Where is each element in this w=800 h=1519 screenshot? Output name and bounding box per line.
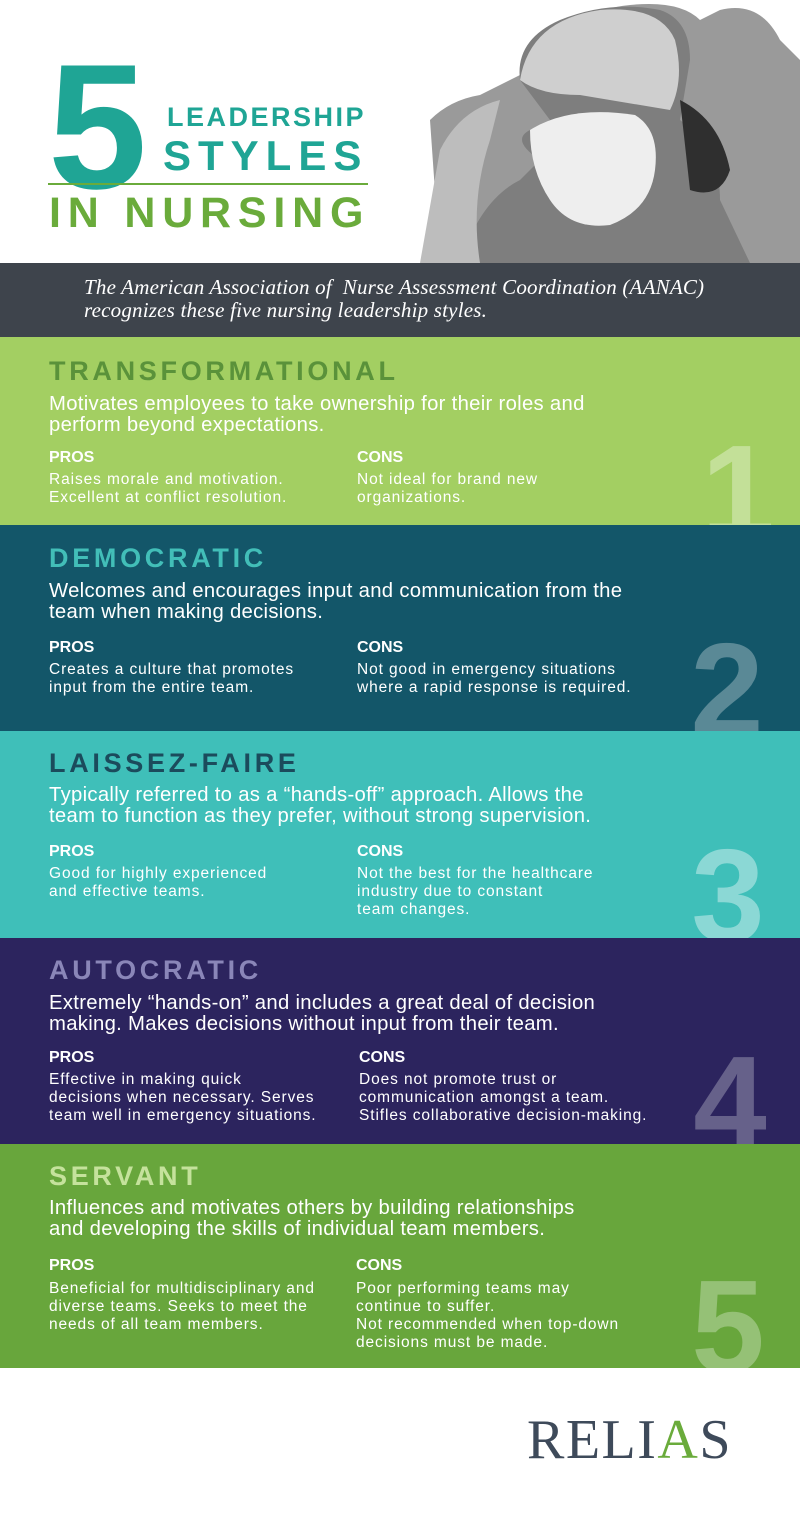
panel: servant: decisions must be made. [356,1334,548,1351]
cons: CONS [357,639,403,656]
panel: democratic: Creates a culture that promotes [49,661,294,678]
panel: servant [0,1144,800,1368]
heading: LAISSEZ-FAIRE [49,748,300,778]
description: making. Makes decisions without input from their team. [49,1013,559,1035]
pros: PROS [49,449,94,466]
panel: transformational: Excellent at conflict resolution. [49,489,287,506]
panel: servant: Poor performing teams may [356,1280,570,1297]
panel: democratic: where a rapid response is required. [357,679,631,696]
panel: democratic: Not good in emergency situations [357,661,616,678]
heading: TRANSFORMATIONAL [49,356,399,386]
cons: CONS [357,449,403,466]
cons: CONS [359,1049,405,1066]
panel: transformational: organizations. [357,489,466,506]
description: and developing the skills of individual team members. [49,1218,545,1240]
cons: CONS [357,843,403,860]
intro text [84,275,704,322]
big number 5: 5 [48,27,147,226]
panel: servant: continue to suffer. [356,1298,495,1315]
description: perform beyond expectations. [49,414,325,436]
panel: laissez-faire: team changes. [357,901,470,918]
description [49,393,585,436]
description: Typically referred to as a “hands-off” approach. Allows the [49,784,584,806]
panel: democratic [0,525,800,731]
pros: PROS [49,1049,94,1066]
panel: servant: Beneficial for multidisciplinary and [49,1280,315,1297]
description: team when making decisions. [49,601,323,623]
heading: SERVANT [49,1161,201,1191]
pros: PROS [49,639,94,656]
description [49,992,595,1035]
panel: transformational: Raises morale and motivation. [49,471,284,488]
panel: laissez-faire: and effective teams. [49,883,205,900]
panel: autocratic: Stifles collaborative decision-making. [359,1107,647,1124]
description [49,580,622,623]
panel: servant: diverse teams. Seeks to meet the [49,1298,308,1315]
panel: laissez-faire: Not the best for the healthcare [357,865,593,882]
title: 5 leadership styles in nursing [48,27,370,237]
pros: PROS [49,843,94,860]
panel: autocratic: communication amongst a team. [359,1089,609,1106]
panel: autocratic: decisions when necessary. Serves [49,1089,314,1106]
intro text: recognizes these five nursing leadership styles. [84,298,487,322]
intro band [0,263,800,337]
panel: autocratic [0,938,800,1144]
description: Welcomes and encourages input and communication from the [49,580,622,602]
logo: relias: RELIAS [527,1409,732,1471]
description: Motivates employees to take ownership for their roles and [49,393,585,415]
heading: styles: STYLES [163,132,368,179]
panel: autocratic: team well in emergency situations. [49,1107,317,1124]
panel: servant: Not recommended when top-down [356,1316,619,1333]
panel: autocratic: Does not promote trust or [359,1071,557,1088]
heading: leadership: LEADERSHIP [167,102,366,132]
pros: PROS [49,1257,94,1274]
panel: transformational: Not ideal for brand new [357,471,538,488]
heading: AUTOCRATIC [49,955,262,985]
heading: in nursing: IN NURSING [49,189,370,237]
photo: nurse tying mask [420,4,800,263]
panel: laissez-faire: Good for highly experienced [49,865,267,882]
description [49,1197,575,1240]
panel: laissez-faire: industry due to constant [357,883,543,900]
panel: servant: needs of all team members. [49,1316,264,1333]
description [49,784,591,827]
description: team to function as they prefer, without strong supervision. [49,805,591,827]
description: Extremely “hands-on” and includes a great deal of decision [49,992,595,1014]
intro text: The American Association of Nurse Assessment Coordination (AANAC) [84,275,704,299]
cons: CONS [356,1257,402,1274]
panel: transformational [0,337,800,525]
panel: autocratic: Effective in making quick [49,1071,242,1088]
description: Influences and motivates others by building relationships [49,1197,575,1219]
panel: laissez-faire [0,731,800,938]
heading: DEMOCRATIC [49,543,267,573]
panel: democratic: input from the entire team. [49,679,254,696]
